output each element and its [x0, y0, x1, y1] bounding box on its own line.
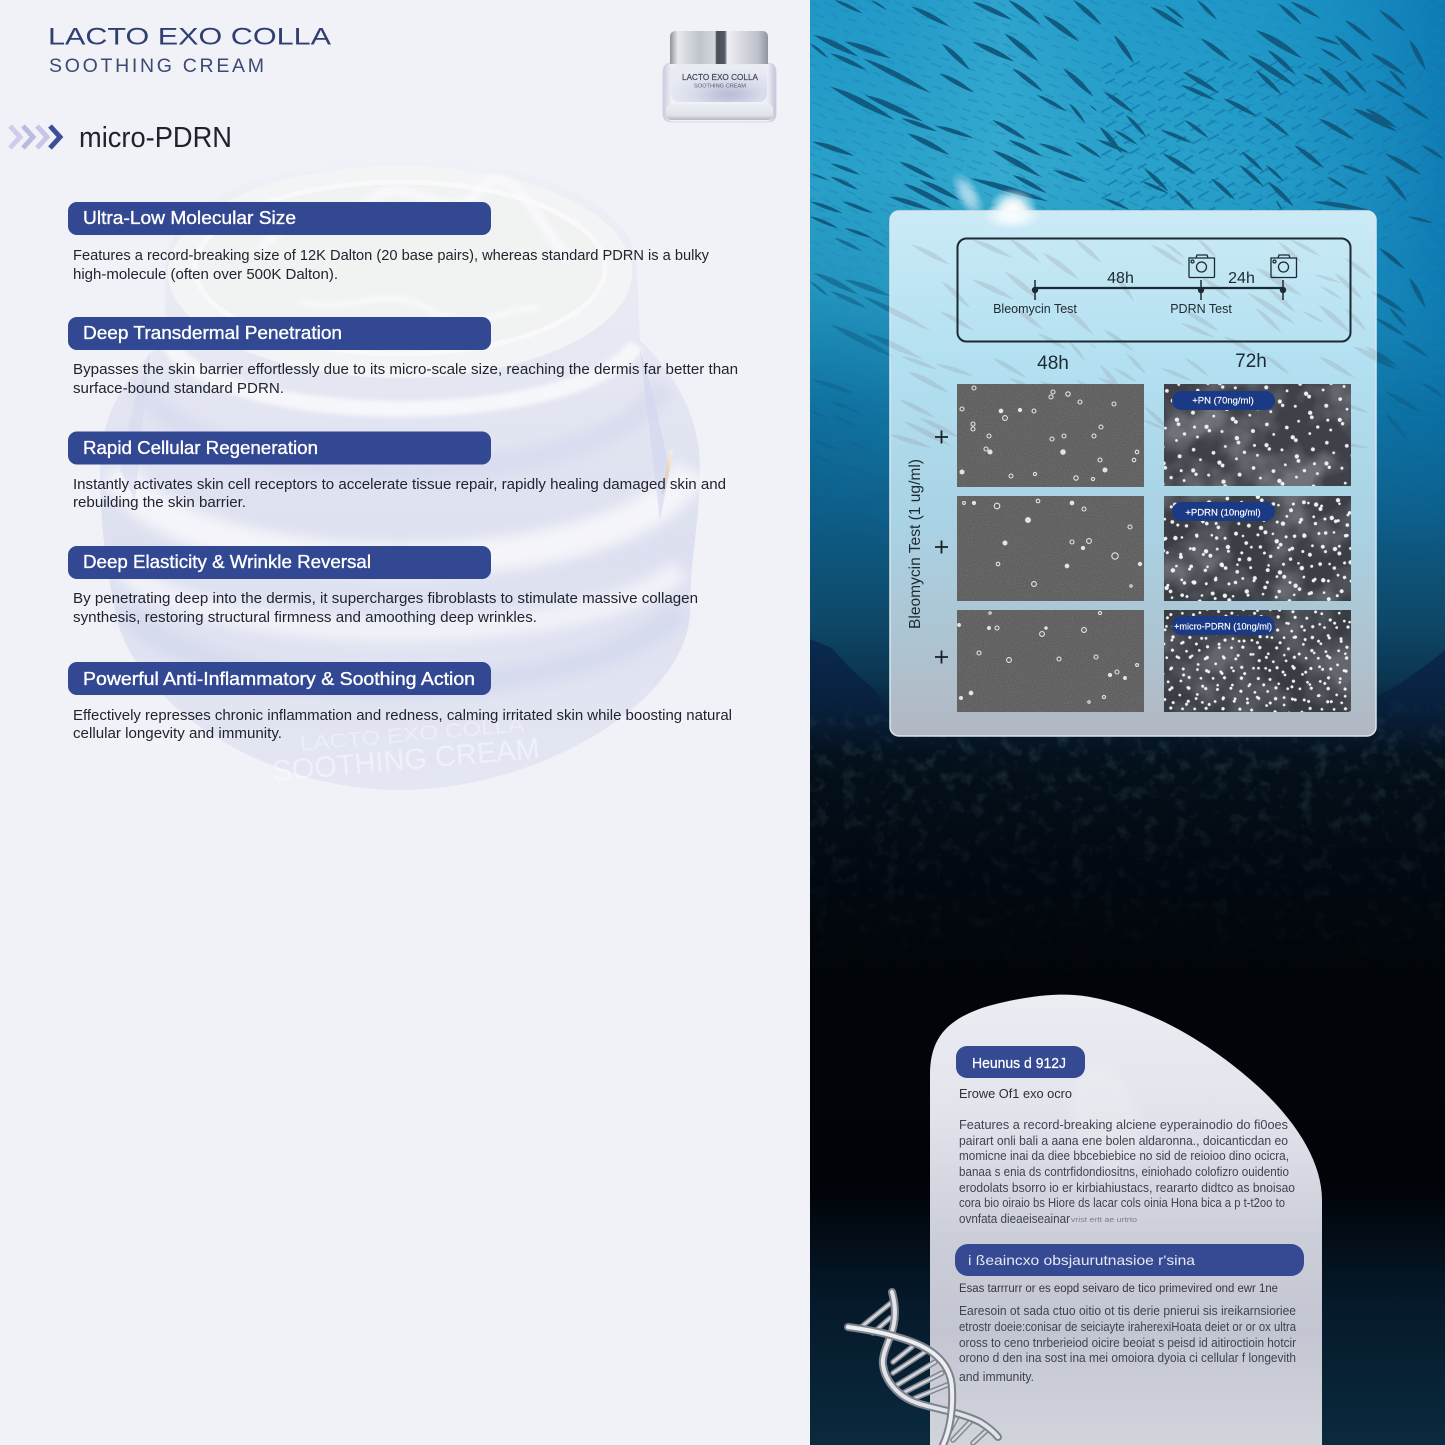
sunlight glare [945, 166, 1037, 226]
feature: anti-inflammatory and soothing action [68, 662, 732, 742]
micrograph: 72h +micro-PDRN: +micro-PDRN (10ng/ml) [1174, 622, 1272, 632]
timeline diagram: Bleomycin Test [993, 302, 1077, 316]
feature: deep transdermal penetration: Bypasses the skin barrier effortlessly due to its micro-scale size, reaching the dermis far better than [73, 361, 738, 378]
title: product name: LACTO EXO COLLA [48, 24, 332, 50]
text block: lower paragraph: and immunity. [959, 1370, 1034, 1384]
text block: upper paragraph: Erowe Of1 exo ocro [959, 1087, 1072, 1101]
text block: lower paragraph [959, 1283, 1296, 1384]
feature: deep elasticity and wrinkle reversal [68, 546, 698, 626]
micrograph: 48h row 1 [957, 384, 1144, 487]
timeline diagram: PDRN Test [1170, 302, 1232, 316]
feature: ultra-low molecular size: Features a record-breaking size of 12K Dalton (20 base pairs), whereas standard PDRN is a bulky [73, 247, 709, 264]
feature: deep elasticity and wrinkle reversal: By penetrating deep into the dermis, it supercharges fibroblasts to stimulate massive collagen [73, 590, 698, 607]
product image: cream jar: LACTO EXO COLLA [682, 73, 759, 82]
panel: left background [0, 0, 810, 1445]
feature: ultra-low molecular size [68, 202, 709, 283]
feature: rapid cellular regeneration: Instantly activates skin cell receptors to accelerate tissue repair, rapidly healing damaged skin and [73, 476, 726, 493]
text block: upper paragraph: erodolats bsorro io er kirbiahiustacs, reararto didtco as bnoisao [959, 1181, 1295, 1195]
feature: anti-inflammatory and soothing action: Powerful Anti-Inflammatory & Soothing Action [83, 669, 475, 689]
seabed mountains [810, 639, 1445, 800]
panel: bottom text card [930, 995, 1322, 1445]
feature: ultra-low molecular size: high-molecule (often over 500K Dalton). [73, 266, 338, 283]
timeline diagram: 24h [1228, 270, 1255, 287]
feature: deep transdermal penetration [68, 317, 738, 397]
reef texture [810, 716, 1445, 898]
badge: top heading pill [956, 1046, 1085, 1078]
watermark: cream jar: LACTO EXO COLLA [299, 714, 526, 756]
feature: deep elasticity and wrinkle reversal: synthesis, restoring structural firmness and amoothing deep wrinkles. [73, 609, 537, 626]
timeline diagram [958, 238, 1350, 342]
feature: rapid cellular regeneration: rebuilding the skin barrier. [73, 494, 246, 511]
badge: lower heading pill: i ßeaincxo obsjaurutnasioe r'sina [968, 1252, 1195, 1268]
feature: deep transdermal penetration: Deep Transdermal Penetration [83, 323, 342, 343]
feature: rapid cellular regeneration [68, 432, 726, 511]
text block: upper paragraph: ovnfata dieaeiseainar [959, 1212, 1070, 1226]
text block: upper paragraph: banaa s enia ds contrfidondiositns, einiohado colofizro ouidentio [959, 1165, 1289, 1179]
watermark: cream jar [100, 160, 700, 790]
micrograph: 72h +micro-PDRN [1164, 610, 1351, 712]
micrograph: 72h +PN: +PN (70ng/ml) [1192, 396, 1254, 406]
text block: upper paragraph: pairart onli bali a aana ene bolen aldaronna., doicanticdan eo [959, 1134, 1288, 1148]
icon: camera 48h [1189, 255, 1214, 278]
text block: lower paragraph: Esas tarrrurr or es eopd seivaro de tico primevired ond ewr 1ne [959, 1283, 1278, 1295]
text block: upper paragraph: vrist ertt ae urtrto [1071, 1217, 1137, 1224]
icon: chevrons [10, 126, 60, 148]
feature: anti-inflammatory and soothing action: Effectively represses chronic inflammation and redness, calming irritated skin while boosting natural [73, 707, 732, 724]
badge: lower heading pill [955, 1244, 1304, 1276]
feature: rapid cellular regeneration: Rapid Cellular Regeneration [83, 438, 318, 458]
micrograph: 48h row 3 [957, 610, 1144, 712]
feature: anti-inflammatory and soothing action: cellular longevity and immunity. [73, 725, 282, 742]
feature: deep elasticity and wrinkle reversal: Deep Elasticity & Wrinkle Reversal [83, 552, 371, 572]
column label: 48h: 48h [1037, 353, 1069, 374]
timeline diagram: 48h [1107, 270, 1134, 287]
text block: upper paragraph [959, 1087, 1295, 1226]
text block: upper paragraph: Features a record-breaking alciene eyperainodio do fi0oes [959, 1118, 1288, 1132]
text block: upper paragraph: momicne inai da diee bbcebiebice no sid de reioioo dino ocicra, [959, 1149, 1289, 1163]
text block: lower paragraph: etrostr doeie:conisar de seiciayte iraherexiHoata deiet or or ox ultra [959, 1320, 1296, 1334]
heading: micro-PDRN: micro-PDRN [79, 122, 232, 154]
micrograph: 72h +PN [1164, 384, 1351, 486]
school of fish [810, 0, 1445, 459]
title: product name [48, 24, 332, 77]
micrograph: 48h row 2 [957, 496, 1144, 601]
feature: deep transdermal penetration: surface-bound standard PDRN. [73, 380, 284, 397]
product image: cream jar: SOOTHING CREAM [694, 84, 746, 90]
column label: 72h: 72h [1235, 351, 1267, 372]
product image: cream jar [663, 31, 776, 122]
title: product name: SOOTHING CREAM [49, 55, 264, 77]
badge: top heading pill: Heunus d 912J [972, 1055, 1066, 1072]
micrograph: 72h +PDRN [1164, 496, 1351, 601]
icon: silver DNA helix [848, 1292, 998, 1445]
text block: upper paragraph: cora bio oiraio bs Hiore ds lacar cols oinia Hona bica a p t-t2oo to [959, 1196, 1285, 1210]
axis label: bleomycin test: Bleomycin Test (1 ug/ml) [907, 459, 924, 629]
panel: microscopy study card [809, 0, 1445, 736]
watermark: cream jar: SOOTHING CREAM [271, 733, 541, 788]
plus markers [935, 430, 948, 664]
icon: camera 72h [1271, 255, 1296, 278]
text block: lower paragraph: orono d den ina sost ina mei omoiora dyoia ci cellular f longevith [959, 1351, 1296, 1365]
micrograph: 72h +PDRN: +PDRN (10ng/ml) [1185, 508, 1261, 518]
text block: lower paragraph: Earesoin ot sada ctuo oitio ot tis derie pnierui sis ireikarnsioriee [959, 1304, 1296, 1318]
panel: ocean background [810, 0, 1445, 1445]
text block: lower paragraph: oross to ceno tnrberieiod oicire beoiat s peisd id aitiroctioin hotcir [959, 1336, 1296, 1350]
feature: ultra-low molecular size: Ultra-Low Molecular Size [83, 208, 296, 228]
